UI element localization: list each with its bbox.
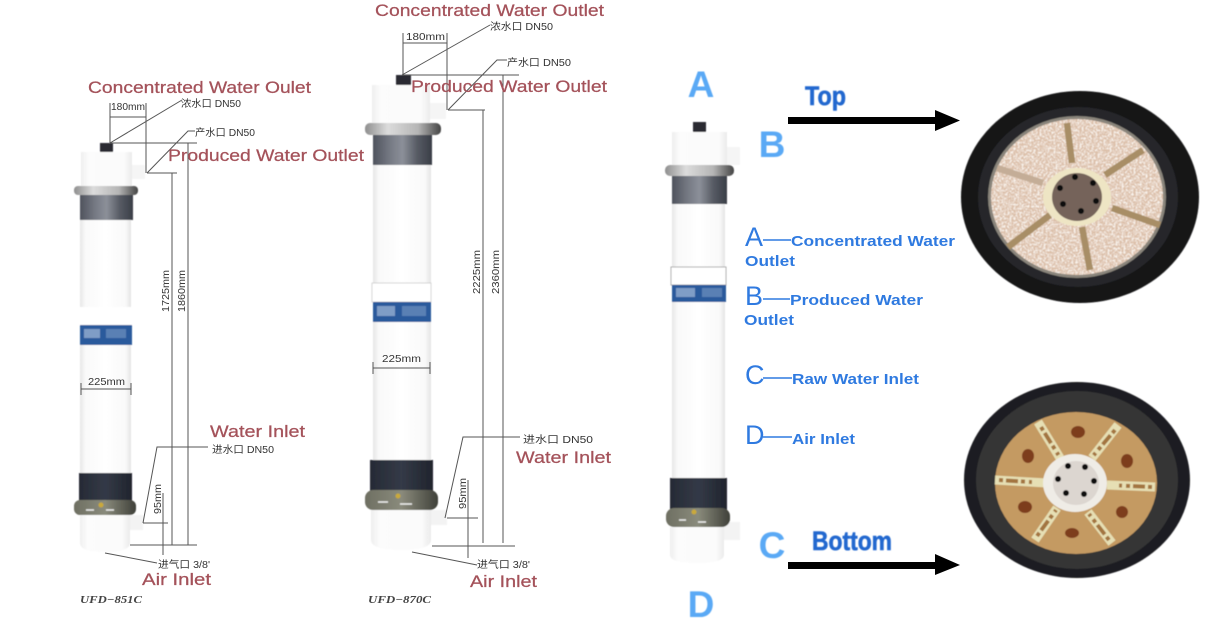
heading: Air Inlet: Air Inlet	[470, 572, 537, 591]
dimension: 180mm: 180mm	[406, 31, 445, 43]
panel: port key module	[665, 64, 955, 625]
letter D: D	[688, 584, 714, 625]
heading: Air Inlet: Air Inlet	[142, 570, 211, 589]
dimension: 225mm: 225mm	[88, 376, 125, 388]
letter A: A	[688, 64, 714, 105]
heading: Top: Top	[805, 81, 846, 111]
heading: Water Inlet: Water Inlet	[210, 422, 305, 441]
dimension: 1860mm: 1860mm	[176, 270, 188, 312]
heading: Produced Water Outlet: Produced Water Outlet	[411, 77, 607, 96]
model name: UFD-870C: UFD−870C	[368, 594, 432, 606]
dimension: 1725mm: 1725mm	[160, 270, 172, 312]
legend: C raw water inlet: C	[745, 360, 764, 390]
module photo: UFD-870C	[365, 75, 447, 550]
legend: A concentrated water outlet: Outlet	[745, 253, 795, 270]
legend: A concentrated water outlet: Concentrated Water	[791, 233, 955, 250]
letter B: B	[759, 124, 785, 165]
heading: Produced Water Outlet: Produced Water Outlet	[168, 146, 364, 165]
label: air inlet size: 进气口 3/8'	[477, 558, 530, 571]
label: water inlet size: 进水口 DN50	[523, 434, 594, 446]
legend: A concentrated water outlet: A	[745, 222, 763, 252]
label: water inlet size: 进水口 DN50	[212, 444, 274, 456]
panel: UFD-870C module diagram	[365, 1, 611, 606]
legend: B produced water outlet: Outlet	[744, 312, 794, 329]
legend: D air inlet: D	[745, 420, 764, 450]
arrow: to bottom view	[788, 554, 960, 575]
legend: C raw water inlet: Raw Water Inlet	[792, 371, 919, 388]
heading: Water Inlet: Water Inlet	[516, 448, 611, 467]
dimension: 95mm: 95mm	[152, 484, 164, 514]
dimension: 95mm: 95mm	[457, 478, 469, 509]
legend: B produced water outlet	[744, 281, 923, 329]
dimension lines: UFD-851C	[81, 100, 208, 563]
heading: Concentrated Water Outlet: Concentrated Water Outlet	[375, 1, 604, 20]
dimension lines: UFD-870C	[373, 25, 520, 565]
legend: D air inlet	[745, 420, 855, 450]
label: air inlet size: 进气口 3/8'	[158, 558, 210, 571]
panel: UFD-851C module diagram	[74, 78, 364, 606]
arrow: to top view	[788, 110, 960, 131]
letter C: C	[759, 525, 785, 566]
label: concentrate port size: 浓水口 DN50	[181, 98, 241, 110]
legend: B produced water outlet: Produced Water	[790, 292, 923, 309]
heading: Concentrated Water Oulet: Concentrated Water Oulet	[88, 78, 311, 97]
module photo: lettered ports	[665, 122, 740, 563]
heading: Bottom: Bottom	[812, 526, 892, 556]
label: product port size: 产水口 DN50	[195, 126, 255, 139]
dimension: 2225mm: 2225mm	[471, 250, 483, 294]
legend: C raw water inlet	[745, 360, 919, 390]
model name: UFD-851C: UFD−851C	[80, 594, 143, 606]
label: product port size: 产水口 DN50	[507, 56, 571, 69]
legend: D air inlet: Air Inlet	[792, 431, 855, 448]
legend: B produced water outlet: B	[745, 281, 763, 311]
dimension: 180mm: 180mm	[111, 101, 145, 113]
photo: bottom end of membrane	[964, 382, 1190, 578]
photo: top end of membrane	[961, 91, 1199, 303]
dimension: 2360mm: 2360mm	[490, 250, 502, 294]
label: concentrate port size: 浓水口 DN50	[490, 21, 553, 33]
module photo: UFD-851C	[74, 143, 145, 552]
legend: A concentrated water outlet	[745, 222, 955, 270]
dimension: 225mm: 225mm	[382, 353, 421, 365]
